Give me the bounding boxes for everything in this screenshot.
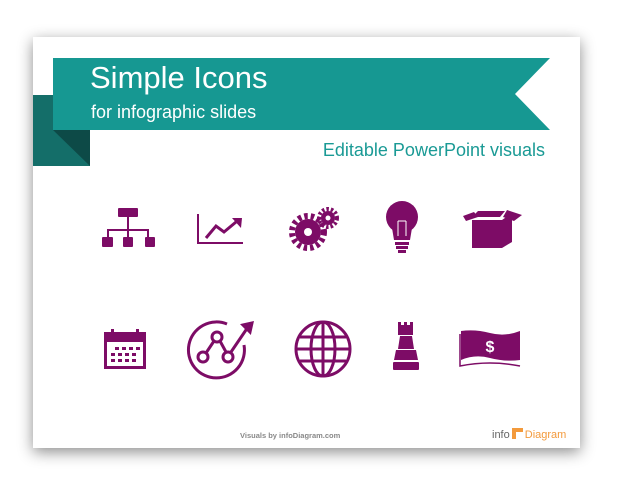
slide	[33, 37, 580, 448]
logo: info Diagram	[492, 429, 566, 441]
subtitle: for infographic slides	[91, 102, 256, 122]
ribbon band	[53, 58, 550, 130]
ribbon fold	[33, 95, 90, 166]
icon: growth chart	[197, 214, 243, 244]
tagline: Editable PowerPoint visuals	[323, 140, 545, 160]
icon: circle trend	[188, 322, 252, 378]
icon: calendar	[104, 329, 146, 369]
icon: box	[463, 210, 522, 248]
icon: banknote	[460, 330, 520, 366]
icon: org chart	[102, 208, 155, 247]
icon: gears	[292, 209, 337, 248]
icon: chess rook	[393, 322, 419, 370]
icon: banknote: $	[486, 339, 495, 356]
footer credit: Visuals by infoDiagram.com	[240, 431, 340, 440]
icon: light bulb	[386, 201, 418, 253]
icon: globe	[296, 322, 350, 376]
title: Simple Icons	[90, 60, 267, 95]
